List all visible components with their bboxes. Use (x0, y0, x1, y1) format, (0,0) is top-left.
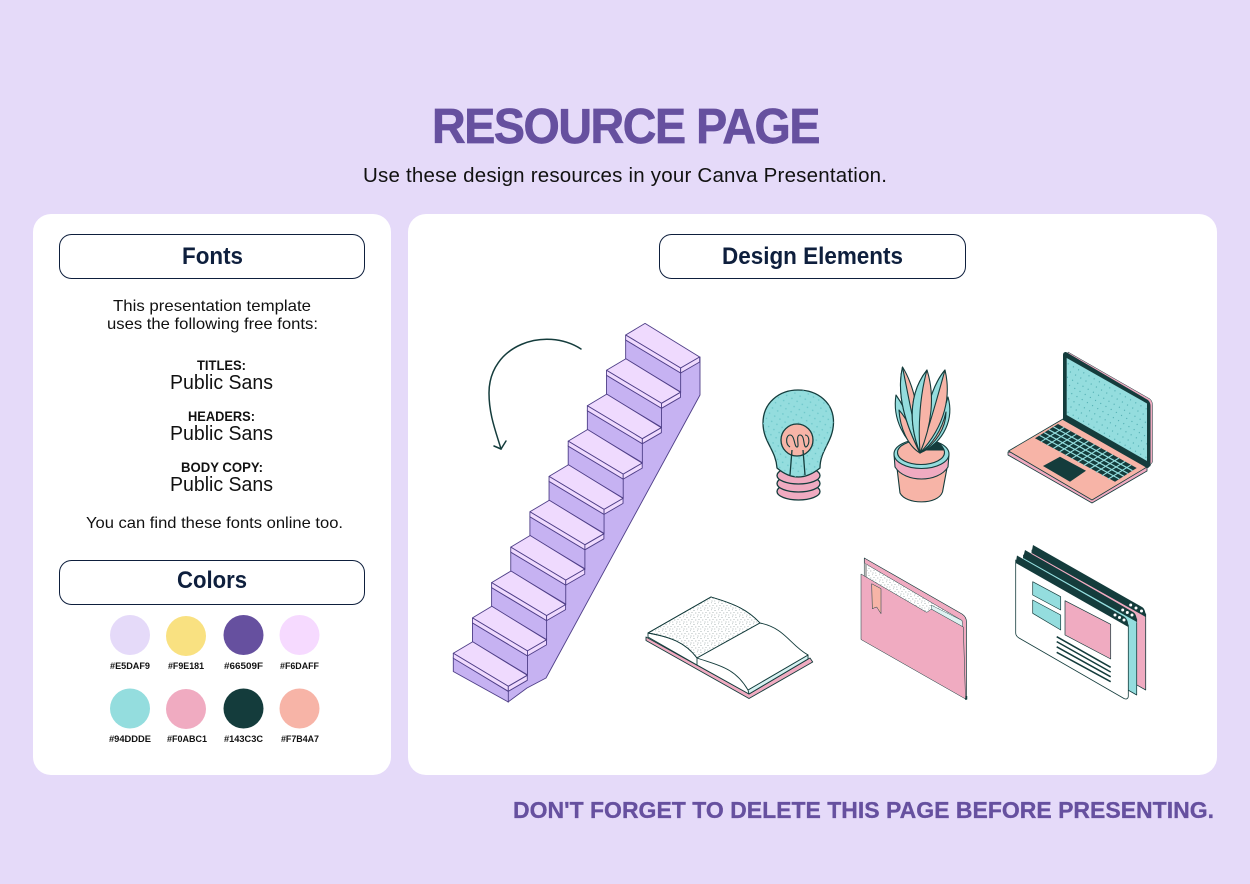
text block: titles font: TITLES: (197, 358, 246, 373)
text block: titles font (170, 358, 273, 394)
arrow: curved (489, 339, 581, 449)
text block: font intro (107, 298, 318, 333)
color swatches: #E5DAF9 (110, 661, 150, 671)
heading: fonts (60, 234, 364, 278)
color swatches: #F0ABC1 (167, 734, 207, 744)
panel: design elements (408, 214, 1217, 775)
text block: headers font (170, 409, 273, 445)
text block: body copy font: BODY COPY: (181, 460, 263, 475)
icon: browser windows (1016, 545, 1146, 699)
plant leaves (895, 367, 950, 453)
text block: font intro: uses the following free fonts: (107, 316, 318, 333)
color swatches: #66509F (224, 661, 264, 671)
color swatches: #F9E181 (168, 661, 204, 671)
text block: body copy font: Public Sans (170, 474, 273, 496)
color swatches (109, 615, 320, 744)
heading: colors (60, 560, 364, 604)
heading: design elements (660, 234, 966, 278)
text block: font intro: This presentation template (113, 298, 311, 315)
icon: potted plant (894, 367, 950, 502)
text block: headers font: HEADERS: (188, 409, 255, 424)
icon: folder with bookmark (861, 558, 966, 699)
color swatches: #94DDDE (109, 734, 151, 744)
icon: light bulb (763, 390, 834, 500)
icon: laptop (1008, 352, 1152, 503)
text block: body copy font (170, 460, 273, 496)
text block: titles font: Public Sans (170, 372, 273, 394)
panel: fonts and colors (33, 214, 391, 775)
title: RESOURCE PAGE (432, 100, 819, 154)
subtitle: Use these design resources in your Canva Presentation. (363, 164, 887, 187)
text block: headers font: Public Sans (170, 423, 273, 445)
color swatches: #143C3C (224, 734, 264, 744)
color swatches: #F7B4A7 (281, 734, 319, 744)
text block: fonts online note: You can find these fonts online too. (86, 515, 343, 532)
icon: isometric staircase (453, 323, 700, 702)
heading: design elements: Design Elements (722, 243, 903, 270)
color swatches: #F6DAFF (280, 661, 319, 671)
icon: open book (646, 597, 813, 698)
footer reminder: DON'T FORGET TO DELETE THIS PAGE BEFORE PRESENTING. (513, 797, 1214, 823)
heading: fonts: Fonts (182, 243, 243, 270)
heading: colors: Colors (177, 567, 247, 594)
